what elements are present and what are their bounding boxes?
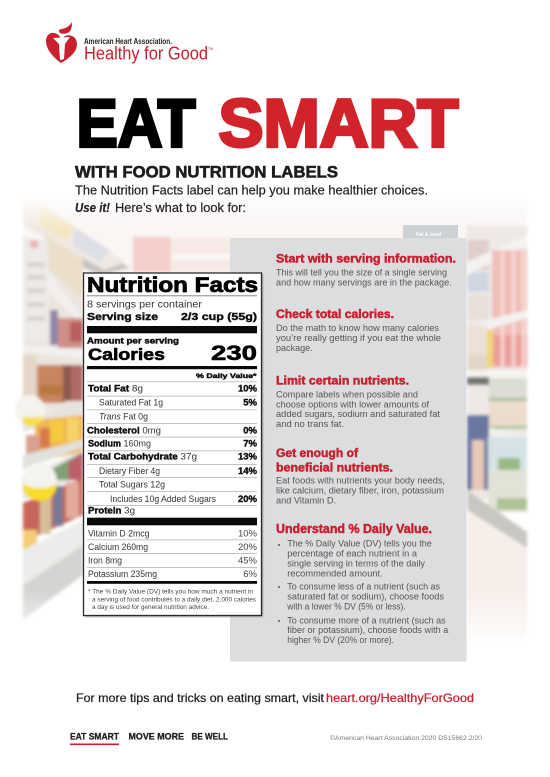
step: beneficial nutrients: like calcium, dietary fiber, iron, potassium xyxy=(276,486,444,496)
logo: American Heart Association Healthy for Good: Healthy for Good xyxy=(84,44,208,64)
call to action xyxy=(76,691,474,705)
nutrient rows: 10% xyxy=(238,384,258,395)
serving information: Serving size xyxy=(87,311,158,323)
step: beneficial nutrients: beneficial nutrients. xyxy=(276,460,393,474)
step: beneficial nutrients: Get enough of xyxy=(276,446,359,460)
title xyxy=(76,86,458,162)
nutrient rows: Sodium 160mg xyxy=(88,439,151,450)
nutrient rows: Saturated Fat 1g xyxy=(99,398,163,409)
nutrition facts label xyxy=(84,273,262,616)
logo: American Heart Association Healthy for Good xyxy=(46,22,213,64)
vitamins and minerals: Iron 8mg xyxy=(88,555,122,566)
footnote: a serving of food contributes to a daily diet. 2,000 calories xyxy=(92,597,256,603)
nutrient rows: 13% xyxy=(238,451,258,462)
footer slogan: EAT SMART xyxy=(70,732,119,742)
panel: how to read the label xyxy=(230,238,466,662)
step: understand percent daily value xyxy=(276,521,448,645)
step: serving information: Start with serving information. xyxy=(276,252,456,266)
nutrient rows: 5% xyxy=(243,398,258,409)
step: limit nutrients: choose options with lower amounts of xyxy=(276,399,429,409)
nutrient rows: 14% xyxy=(238,466,258,477)
step: understand percent daily value: The % Daily Value (DV) tells you the xyxy=(287,538,432,548)
intro text: Use it! xyxy=(75,201,110,215)
step: understand percent daily value: with a lower % DV (5% or less). xyxy=(286,602,406,612)
step: serving information xyxy=(276,252,456,288)
step: limit nutrients xyxy=(276,373,441,429)
step: total calories xyxy=(276,307,441,353)
footnote: a day is used for general nutrition advice. xyxy=(92,605,209,611)
tab: Fat & meat aisle sign: Fat & meat xyxy=(416,232,442,238)
step: limit nutrients: and no trans fat. xyxy=(276,419,344,429)
intro text: Here’s what to look for: xyxy=(115,201,246,215)
step: total calories: package. xyxy=(276,343,313,353)
serving information: 2/3 cup (55g) xyxy=(181,311,257,323)
title: SMART xyxy=(218,86,458,162)
yellow promo circles xyxy=(15,395,57,501)
calories: Amount per serving xyxy=(87,336,179,346)
left shelves xyxy=(23,250,83,410)
icon: heart and torch xyxy=(46,22,77,63)
footer slogan: BE WELL xyxy=(192,732,228,742)
nutrient rows: 20% xyxy=(238,494,258,505)
vitamins and minerals: Potassium 235mg xyxy=(88,569,157,580)
logo text: American Heart Association. xyxy=(84,37,172,46)
nutrient rows: Dietary Fiber 4g xyxy=(99,466,160,477)
step: understand percent daily value: fiber or potassium), choose foods with a xyxy=(287,625,448,635)
intro text xyxy=(75,184,428,215)
nutrient rows: Total Carbohydrate 37g xyxy=(88,451,197,462)
copyright: ©American Heart Association 2020 DS15662 2/20 xyxy=(330,735,483,742)
step: total calories: you’re really getting if you eat the whole xyxy=(276,333,441,343)
vitamins and minerals: 20% xyxy=(238,542,258,553)
step: understand percent daily value: recommended amount. xyxy=(287,568,383,578)
serving information: 8 servings per container xyxy=(87,300,203,311)
logo: American Heart Association Healthy for Good: TM xyxy=(208,47,213,51)
background: supermarket aisle photo xyxy=(0,190,550,777)
nutrient rows: Cholesterol 0mg xyxy=(87,425,161,436)
title: EAT xyxy=(76,86,196,162)
call to action: heart.org/HealthyForGood xyxy=(326,691,474,705)
step: limit nutrients: added sugars, sodium and saturated fat xyxy=(276,409,441,419)
footnote: * The % Daily Value (DV) tells you how much a nutrient in xyxy=(88,589,253,595)
nutrient rows xyxy=(87,382,258,517)
calories: 230 xyxy=(211,341,257,365)
intro text: The Nutrition Facts label can help you make healthier choices. xyxy=(75,184,428,198)
vitamins and minerals xyxy=(87,528,258,580)
nutrient rows: 0% xyxy=(243,425,258,436)
right shelves xyxy=(467,225,527,500)
step: understand percent daily value: To consume less of a nutrient (such as xyxy=(287,582,440,592)
footnote xyxy=(88,589,256,611)
step: total calories: Do the math to know how many calories xyxy=(276,323,440,333)
step: beneficial nutrients xyxy=(276,446,445,506)
nutrient rows: 7% xyxy=(243,439,258,450)
tab: Fat & meat aisle sign xyxy=(403,225,458,239)
vitamins and minerals: Calcium 260mg xyxy=(88,542,148,553)
vitamins and minerals: 45% xyxy=(238,555,258,566)
nutrient rows: Total Sugars 12g xyxy=(99,480,165,491)
nutrient rows: Includes 10g Added Sugars xyxy=(110,494,216,505)
step: understand percent daily value: Understand % Daily Value. xyxy=(276,521,432,536)
daily value header: % Daily Value* xyxy=(196,373,257,380)
vitamins and minerals: 6% xyxy=(243,569,258,580)
step: understand percent daily value: saturated fat or sodium), choose foods xyxy=(287,592,445,602)
label heading: Nutrition Facts xyxy=(87,273,258,297)
step: limit nutrients: Limit certain nutrients. xyxy=(276,373,409,387)
step: total calories: Check total calories. xyxy=(276,307,394,321)
nutrient rows: Total Fat 8g xyxy=(88,384,143,395)
footer slogan: MOVE MORE xyxy=(128,732,184,742)
nutrient rows: Trans Fat 0g xyxy=(99,411,148,422)
footer slogan xyxy=(70,732,228,745)
step: understand percent daily value: percentage of each nutrient in a xyxy=(287,548,417,558)
step: understand percent daily value: higher % DV (20% or more). xyxy=(287,635,394,645)
vitamins and minerals: 10% xyxy=(238,528,258,539)
step: beneficial nutrients: Eat foods with nutrients your body needs, xyxy=(276,476,445,486)
step: limit nutrients: Compare labels when possible and xyxy=(276,389,418,399)
vitamins and minerals: Vitamin D 2mcg xyxy=(88,528,150,539)
step: understand percent daily value: To consume more of a nutrient (such as xyxy=(287,615,446,625)
step: understand percent daily value: single serving in terms of the daily xyxy=(287,558,426,568)
step: beneficial nutrients: and Vitamin D. xyxy=(276,496,336,506)
step: serving information: and how many servings are in the package. xyxy=(276,278,452,288)
serving information xyxy=(87,300,257,323)
step: serving information: This will tell you the size of a single serving xyxy=(276,268,447,278)
calories xyxy=(87,336,257,365)
calories: Calories xyxy=(88,345,165,364)
nutrient rows: Protein 3g xyxy=(88,506,135,517)
call to action: For more tips and tricks on eating smart, visit xyxy=(76,691,325,705)
subtitle: WITH FOOD NUTRITION LABELS xyxy=(75,162,338,182)
